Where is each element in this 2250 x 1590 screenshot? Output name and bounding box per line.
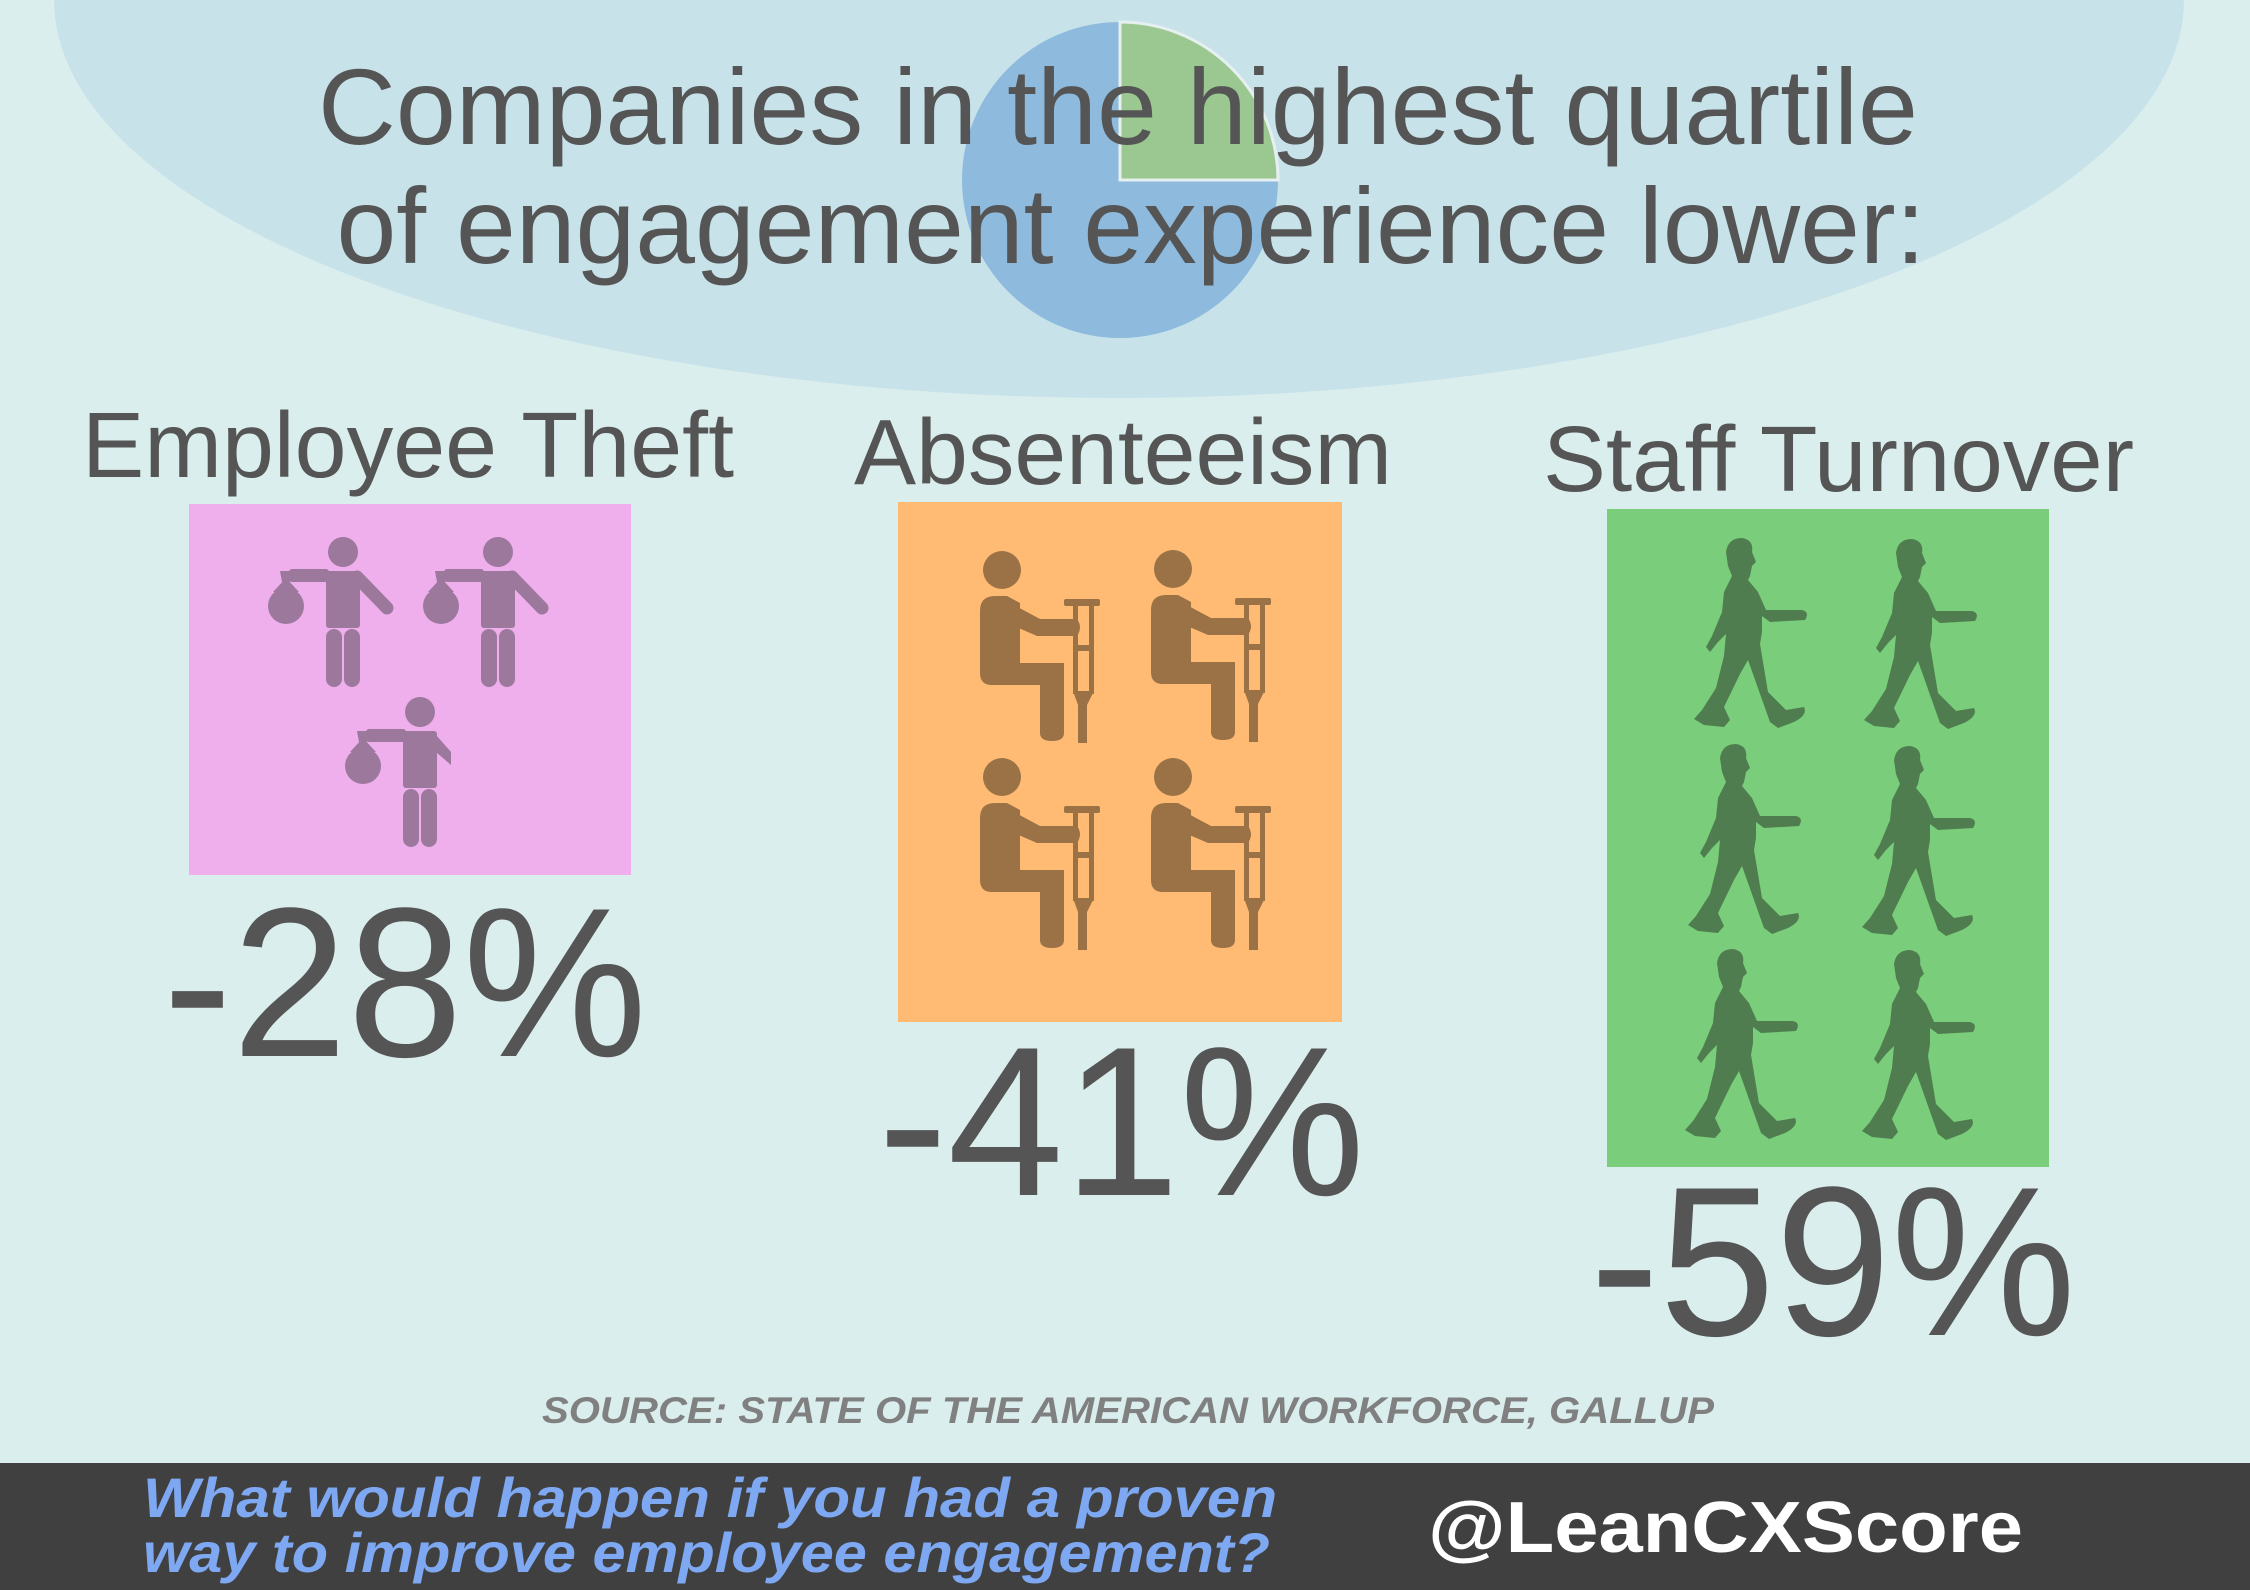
pie chart xyxy=(962,22,1278,338)
title xyxy=(318,46,1926,286)
footer question: What would happen if you had a proven xyxy=(143,1466,1277,1529)
background ellipse xyxy=(54,0,2184,398)
icon: thieves xyxy=(268,537,542,847)
heading: Staff Turnover: Staff Turnover xyxy=(1543,407,2134,511)
icon: injured sitters xyxy=(980,550,1271,950)
footer question xyxy=(143,1466,1277,1584)
title: of engagement experience lower: xyxy=(336,165,1926,286)
panel: staff turnover xyxy=(1607,509,2049,1167)
panel: absenteeism xyxy=(898,502,1342,1022)
panel: employee theft xyxy=(189,504,631,875)
number: -28%: -28% xyxy=(163,864,647,1102)
title: Companies in the highest quartile xyxy=(318,46,1918,167)
number: -41%: -41% xyxy=(878,1003,1365,1241)
footer question: way to improve employee engagement? xyxy=(143,1521,1270,1584)
source note: SOURCE: STATE OF THE AMERICAN WORKFORCE, GALLUP xyxy=(542,1390,1714,1431)
heading: Absenteeism: Absenteeism xyxy=(854,400,1392,504)
number: -59%: -59% xyxy=(1590,1143,2076,1381)
footer handle: @LeanCXScore xyxy=(1428,1488,2023,1568)
heading: Employee Theft: Employee Theft xyxy=(82,393,734,497)
footer bar xyxy=(0,1463,2250,1590)
icon: walkers xyxy=(1685,538,1977,1140)
